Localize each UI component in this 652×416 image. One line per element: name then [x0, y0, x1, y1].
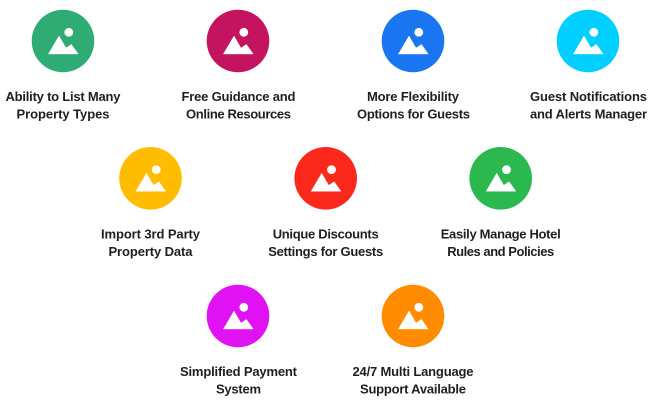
label: Simplified Payment System — [180, 364, 298, 396]
label: More Flexibility Options for Guests — [357, 89, 470, 122]
feature: Import 3rd Party Property Data — [101, 147, 201, 259]
feature: More Flexibility Options for Guests — [357, 10, 470, 122]
label: Guest Notifications and Alerts Manager — [530, 89, 647, 122]
label: Simplified Payment System: System — [216, 382, 261, 396]
label: Unique Discounts Settings for Guests — [268, 226, 383, 259]
label: Free Guidance and Online Resources — [182, 89, 296, 122]
feature: Simplified Payment System — [180, 285, 298, 396]
label: Guest Notifications and Alerts Manager: and Alerts Manager — [530, 106, 647, 122]
label: Import 3rd Party Property Data: Import 3rd Party — [101, 226, 201, 242]
label: Free Guidance and Online Resources: Free Guidance and — [182, 89, 296, 104]
label: Import 3rd Party Property Data: Property Data — [108, 244, 193, 259]
icon: blue image circle — [382, 10, 444, 72]
label: Import 3rd Party Property Data — [101, 226, 201, 259]
feature: 24/7 Multi Language Support Available — [352, 285, 474, 396]
feature: Unique Discounts Settings for Guests — [268, 147, 383, 259]
feature: Free Guidance and Online Resources — [182, 10, 296, 122]
label: Free Guidance and Online Resources: Online Resources — [186, 106, 291, 122]
icon: green image circle — [32, 10, 94, 72]
label: Ability to List Many Property Types: Property Types — [16, 106, 110, 122]
label: Unique Discounts Settings for Guests: Unique Discounts — [273, 226, 379, 242]
icon: cyan image circle — [557, 10, 619, 72]
label: Simplified Payment System: Simplified Payment — [180, 364, 298, 379]
label: Easily Manage Hotel Rules and Policies — [441, 226, 561, 259]
feature: Ability to List Many Property Types — [6, 10, 121, 122]
icon: orange image circle — [382, 285, 444, 347]
icon: green image circle — [469, 147, 532, 210]
icon: red image circle — [294, 147, 357, 210]
label: 24/7 Multi Language Support Available — [352, 364, 474, 396]
label: More Flexibility Options for Guests: More Flexibility — [367, 89, 460, 104]
label: Guest Notifications and Alerts Manager: Guest Notifications — [530, 89, 647, 104]
label: More Flexibility Options for Guests: Options for Guests — [357, 106, 470, 122]
label: Ability to List Many Property Types — [6, 89, 121, 122]
feature: Guest Notifications and Alerts Manager — [530, 10, 647, 122]
label: Easily Manage Hotel Rules and Policies: Rules and Policies — [447, 244, 554, 259]
label: 24/7 Multi Language Support Available: Support Available — [360, 382, 466, 396]
icon: amber image circle — [119, 147, 182, 210]
feature: Easily Manage Hotel Rules and Policies — [441, 147, 561, 259]
icon: crimson image circle — [207, 10, 269, 72]
label: Unique Discounts Settings for Guests: Settings for Guests — [268, 244, 383, 259]
label: Ability to List Many Property Types: Ability to List Many — [6, 89, 121, 104]
icon: magenta image circle — [207, 285, 269, 347]
label: Easily Manage Hotel Rules and Policies: Easily Manage Hotel — [441, 226, 561, 242]
label: 24/7 Multi Language Support Available: 24/7 Multi Language — [352, 364, 474, 379]
